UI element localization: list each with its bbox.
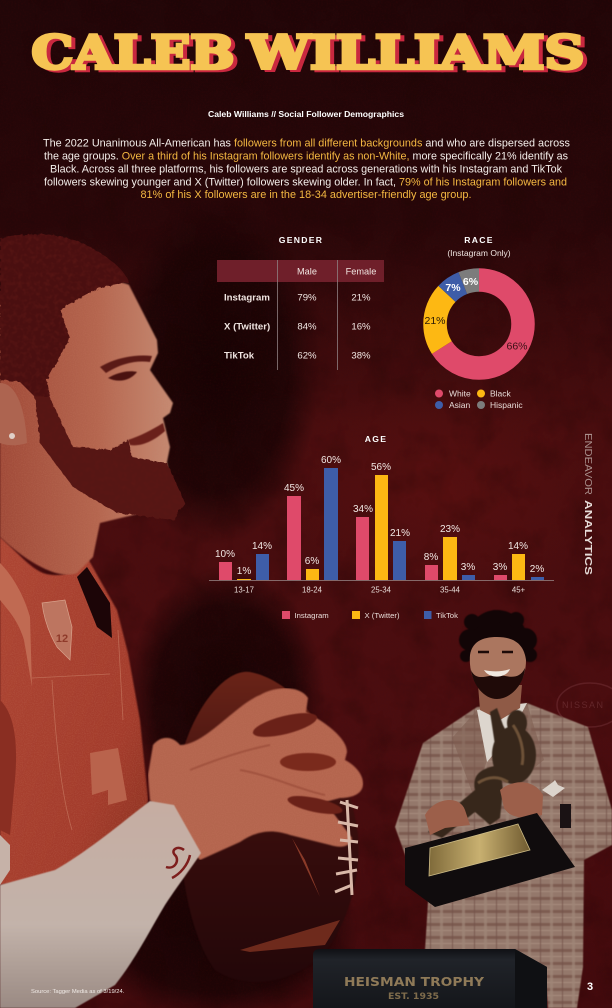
lapels xyxy=(452,703,544,800)
jersey seams xyxy=(32,630,123,830)
title: WILLIAMS xyxy=(246,26,584,80)
panel: gender table: Male xyxy=(297,266,317,276)
bar value labels: 14% xyxy=(508,541,528,552)
left hand xyxy=(425,800,470,835)
beard xyxy=(471,668,525,699)
brand: endeavor analytics xyxy=(582,433,594,575)
pac-12 shield patch: 12 xyxy=(56,633,68,645)
donut legend: Black xyxy=(490,388,512,398)
eyebrow and eye xyxy=(100,355,152,373)
shoulder stripe xyxy=(0,563,32,687)
neck and face xyxy=(0,281,175,575)
bar value labels: 14% xyxy=(252,541,272,552)
beard xyxy=(35,397,185,520)
panel: gender table: 21% xyxy=(351,292,371,304)
table header xyxy=(217,260,384,282)
page number: 3 xyxy=(587,981,593,993)
podium xyxy=(313,949,547,1008)
bar value labels: 6% xyxy=(305,556,319,567)
intro text: followers skewing younger and X (Twitter) followers skewing older. In fact, 79% of his Instagram followers and xyxy=(44,176,567,188)
trophy base xyxy=(405,813,575,907)
donut legend xyxy=(435,388,523,410)
age legend xyxy=(282,611,458,620)
donut legend: Hispanic xyxy=(490,400,523,410)
bar value labels: 10% xyxy=(215,549,235,560)
source note: Source: Tagger Media as of 3/19/24. xyxy=(31,989,125,995)
small sleeve other arm xyxy=(0,835,10,885)
age axis labels xyxy=(234,586,526,594)
right hand xyxy=(500,782,543,818)
ball stripe xyxy=(292,838,320,897)
panel: gender table: 79% xyxy=(297,292,317,304)
face xyxy=(470,637,526,698)
intro text: Black. Across all three platforms, his followers are spread across generations with his Instagram and TikTok xyxy=(50,164,563,176)
suit xyxy=(395,703,612,1008)
instagram bars xyxy=(219,496,507,580)
age legend: X (Twitter) xyxy=(364,611,400,620)
podium: EST. 1935 xyxy=(388,992,439,1002)
intro text xyxy=(43,138,570,201)
jersey xyxy=(0,537,148,885)
bar value labels: 56% xyxy=(371,462,391,473)
bar value labels: 34% xyxy=(353,504,373,515)
x twitter bars xyxy=(237,475,525,580)
panel: gender table: 38% xyxy=(351,350,371,362)
football xyxy=(177,672,359,982)
donut labels: 7% xyxy=(445,282,461,294)
panel: gender table: 16% xyxy=(351,322,371,332)
age axis labels: 35-44 xyxy=(440,586,461,594)
neck xyxy=(478,685,522,720)
title: CALEB xyxy=(32,26,234,80)
donut labels: 21% xyxy=(424,315,446,327)
age axis labels: 25-34 xyxy=(371,586,392,594)
title: CALEB xyxy=(36,28,238,82)
subtitle: Caleb Williams // Social Follower Demographics xyxy=(208,109,404,119)
podium text: HEISMAN TROPHY xyxy=(344,974,485,989)
hair xyxy=(459,610,537,670)
dark sleeve xyxy=(0,700,16,835)
ball between fingers xyxy=(251,708,344,818)
hair xyxy=(0,234,129,397)
laces xyxy=(335,800,358,895)
panel: age bar chart xyxy=(209,434,554,620)
bar value labels: 3% xyxy=(461,562,475,573)
donut labels: 66% xyxy=(506,340,528,352)
donut labels xyxy=(424,276,528,352)
ball panel highlight xyxy=(240,920,340,952)
bar value labels xyxy=(215,455,544,577)
age axis labels: 45+ xyxy=(512,586,526,594)
brand: endeavor analytics: ENDEAVOR xyxy=(582,433,594,495)
nissan backdrop logo: NISSAN xyxy=(562,700,605,710)
bar value labels: 8% xyxy=(424,552,438,563)
title xyxy=(32,26,588,82)
photo: caleb williams with heisman trophy xyxy=(395,610,612,1008)
age axis labels: 18-24 xyxy=(302,586,323,594)
title: WILLIAMS xyxy=(250,28,588,82)
heading: age: AGE xyxy=(365,434,387,444)
bar value labels: 1% xyxy=(237,566,251,577)
earring xyxy=(9,433,15,439)
panel: gender table: Female xyxy=(346,266,376,276)
intro text: the age groups. Over a third of his Instagram followers identify as non-White, more specifically 21% identify as xyxy=(44,150,568,162)
panel: gender table xyxy=(217,235,384,370)
panel: gender table: TikTok xyxy=(224,350,255,362)
number patch xyxy=(90,748,127,805)
heisman trophy figure xyxy=(428,708,536,838)
watch xyxy=(560,804,571,828)
shirt xyxy=(477,703,527,762)
panel: race donut xyxy=(424,235,528,410)
bar value labels: 3% xyxy=(493,562,507,573)
panel: gender table: Instagram xyxy=(224,292,270,304)
donut labels: 6% xyxy=(463,276,479,288)
brand: endeavor analytics: ANALYTICS xyxy=(582,500,594,575)
knuckle shading xyxy=(190,745,325,795)
bar value labels: 60% xyxy=(321,455,341,466)
mouth xyxy=(128,423,165,445)
donut legend: Asian xyxy=(449,400,471,410)
pac-12 shield patch xyxy=(42,600,72,660)
intro text: The 2022 Unanimous All-American has followers from all different backgrounds and who are dispersed across xyxy=(43,138,570,150)
donut chart xyxy=(435,280,523,368)
smile xyxy=(484,669,510,677)
adidas logo xyxy=(542,780,565,797)
intro text: 81% of his X followers are in the 18-34 advertiser-friendly age group. xyxy=(140,189,472,201)
collar opening xyxy=(77,567,112,638)
panel: gender table: 84% xyxy=(297,322,317,332)
plaque xyxy=(429,824,530,876)
age axis labels: 13-17 xyxy=(234,586,254,594)
arm sleeve xyxy=(0,801,201,1008)
bar value labels: 21% xyxy=(390,528,410,539)
usc logo on sleeve xyxy=(166,848,190,878)
panel: gender table: 62% xyxy=(297,350,317,362)
heading: gender: GENDER xyxy=(279,235,323,245)
tiktok bars xyxy=(256,468,544,580)
hand xyxy=(148,688,363,860)
trophy highlight xyxy=(478,725,523,783)
bar value labels: 45% xyxy=(284,483,304,494)
ear xyxy=(0,383,27,445)
heading: race: RACE xyxy=(464,235,494,245)
photo: caleb williams profile holding football xyxy=(0,234,363,1008)
age legend: TikTok xyxy=(436,611,458,620)
donut legend: White xyxy=(449,388,471,398)
bar value labels: 23% xyxy=(440,524,460,535)
bar value labels: 2% xyxy=(530,564,544,575)
panel: gender table: X (Twitter) xyxy=(224,322,270,332)
age legend: Instagram xyxy=(294,611,329,620)
sub heading: (Instagram Only) xyxy=(447,248,511,258)
eyes xyxy=(478,651,513,653)
nissan backdrop logo xyxy=(557,683,612,727)
